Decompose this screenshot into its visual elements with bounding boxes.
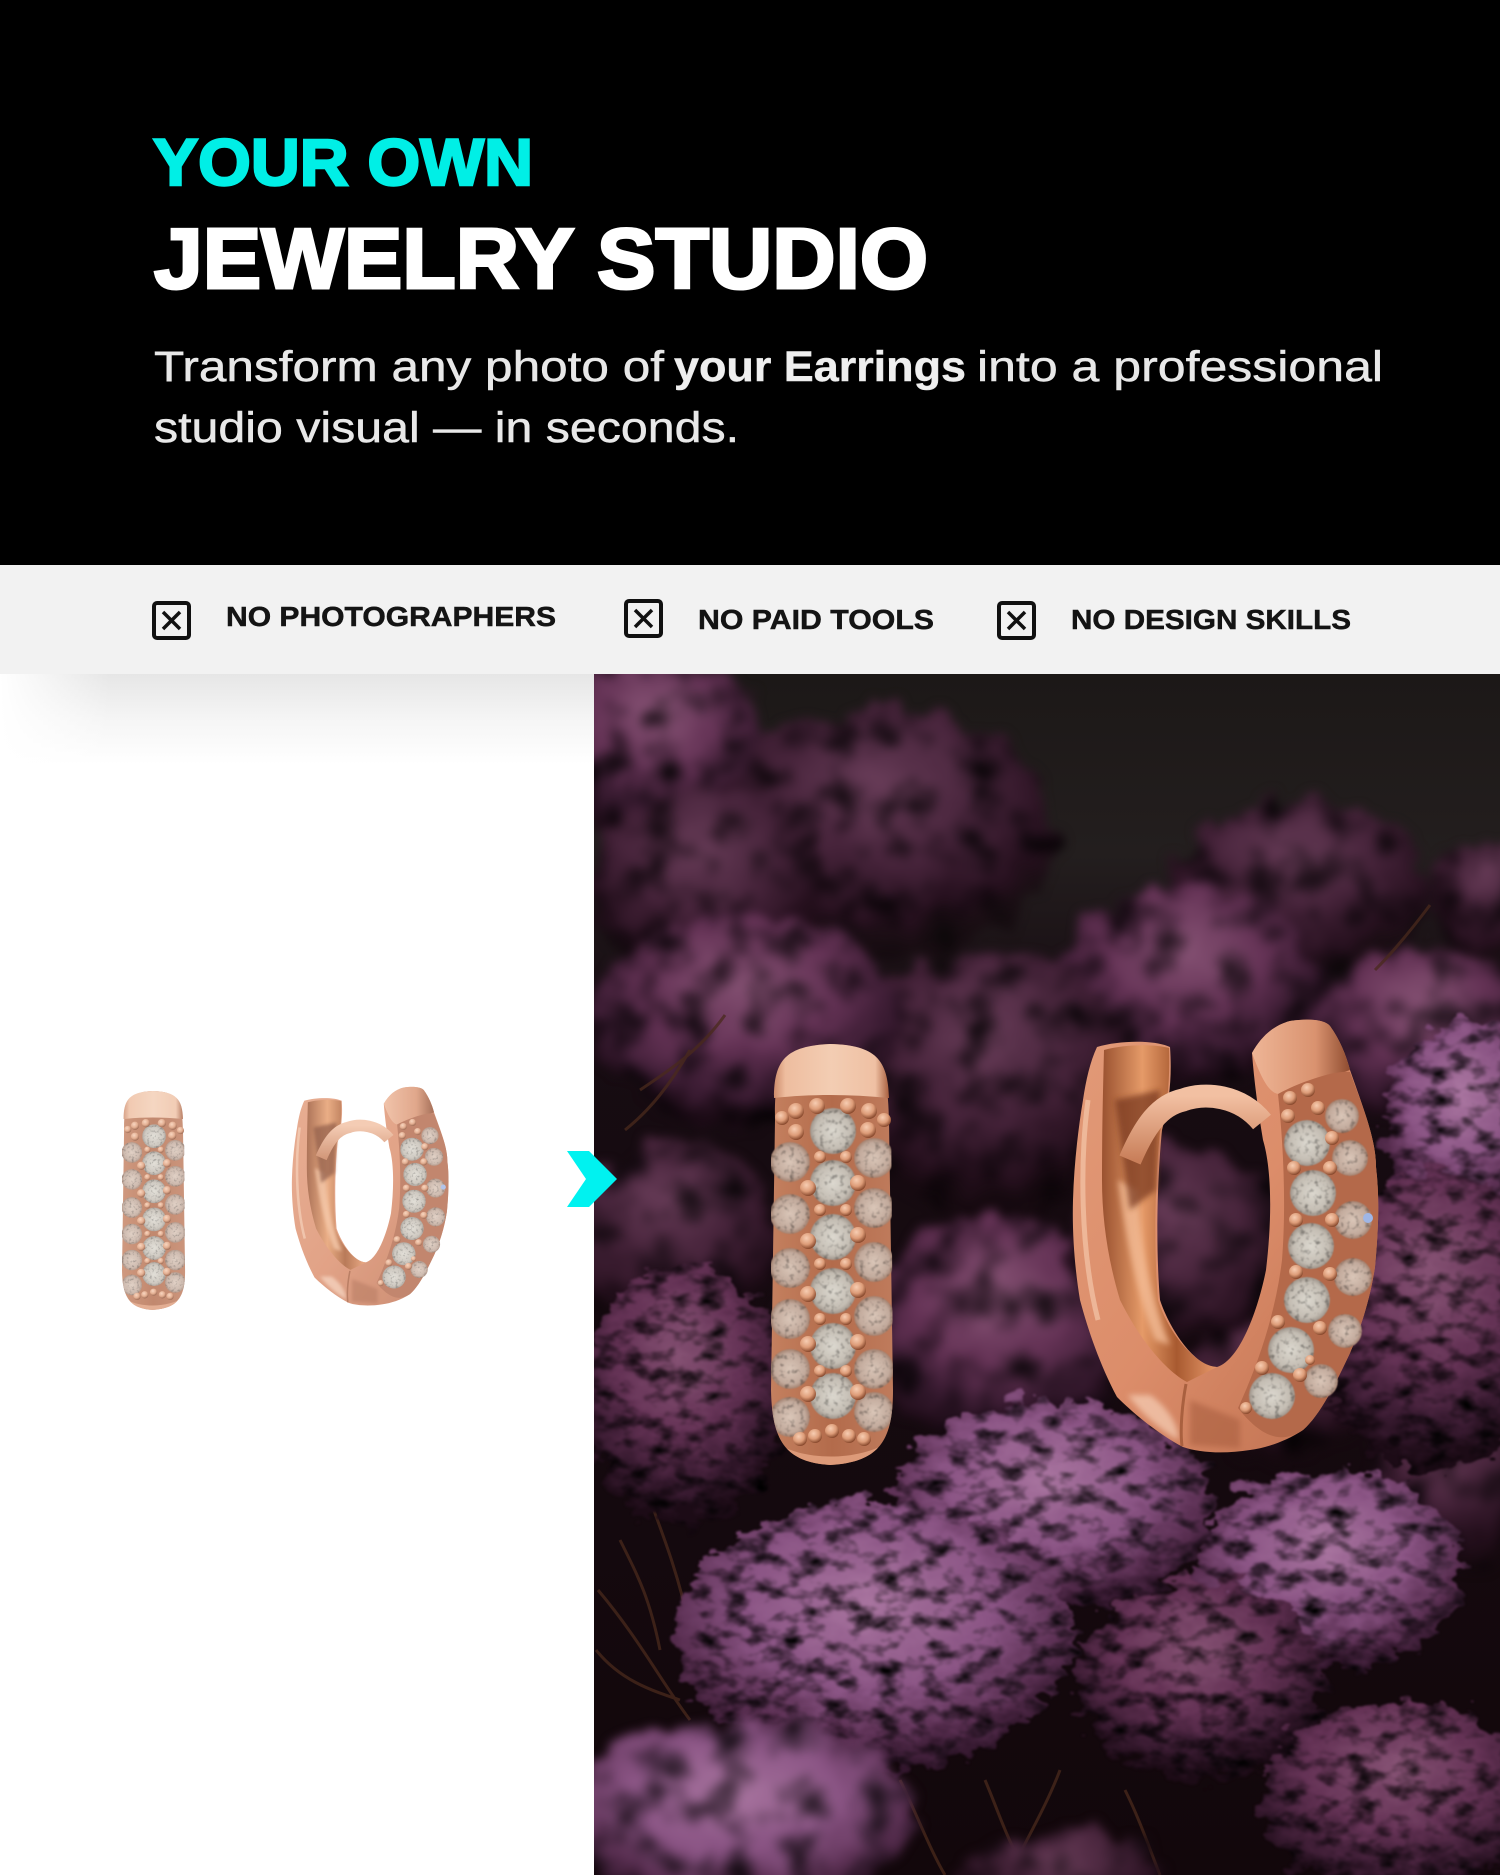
benefit: no paid tools: NO PAID TOOLS xyxy=(698,604,934,635)
earring: front view xyxy=(770,1044,894,1470)
earring: side view xyxy=(1073,1020,1378,1452)
foreground flowers xyxy=(585,1020,1500,1875)
panel: original product photo xyxy=(0,674,594,1875)
subtitle text block: your Earrings xyxy=(674,343,966,391)
benefit: no design skills xyxy=(999,603,1351,638)
benefit: no design skills: NO DESIGN SKILLS xyxy=(1071,604,1351,635)
dried flower stems xyxy=(596,905,1495,1875)
small earring: front view xyxy=(121,1091,186,1312)
panel: studio photo xyxy=(555,650,1500,1875)
subtitle text block: Transform any photo of xyxy=(154,343,665,391)
subtitle text block: studio visual — in seconds. xyxy=(154,404,739,452)
benefit: no photographers: NO PHOTOGRAPHERS xyxy=(226,601,556,632)
panel: benefits bar xyxy=(0,565,1500,674)
subtitle text block xyxy=(154,343,1383,452)
benefit: no photographers xyxy=(154,601,556,638)
small earring: side view xyxy=(292,1087,449,1305)
title: your own: YOUR OWN xyxy=(153,125,533,199)
background flowers xyxy=(555,650,1500,1570)
title: jewelry studio: JEWELRY STUDIO xyxy=(154,212,928,307)
panel: header xyxy=(0,0,1500,565)
benefit: no paid tools xyxy=(626,601,934,636)
arrow: cyan chevron xyxy=(567,1151,617,1207)
blurred foreground flowers xyxy=(565,1720,1160,1875)
subtitle text block: into a professional xyxy=(977,343,1383,391)
